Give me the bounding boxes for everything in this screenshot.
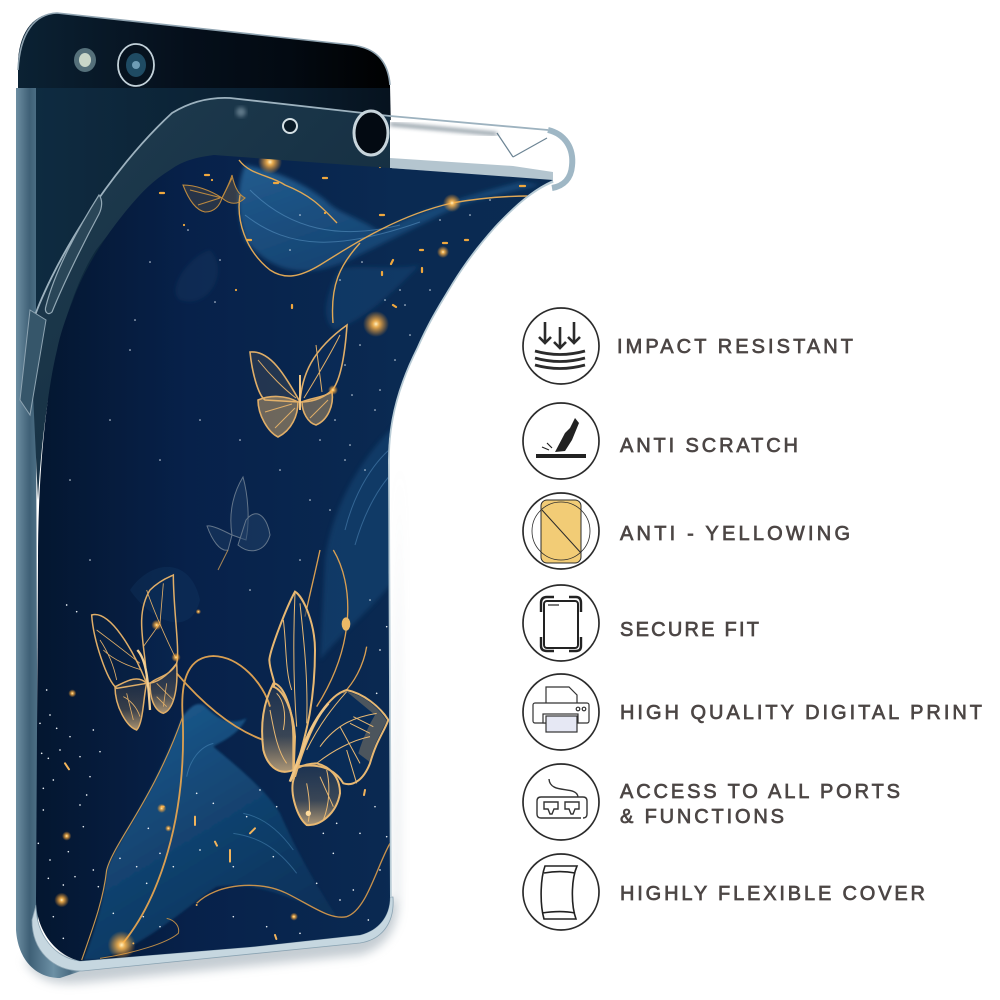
- label: & FUNCTIONS: [620, 806, 784, 828]
- butterfly: left: [92, 575, 178, 730]
- bottom sparks: [54, 609, 298, 959]
- lower artwork in zoom coordinates: [38, 550, 390, 960]
- butterfly: top small: [183, 175, 245, 212]
- label: ACCESS TO ALL PORTS: [620, 781, 900, 803]
- butterfly: upper middle: [250, 325, 347, 437]
- feature: ports: [523, 764, 900, 840]
- icon: secure fit: [523, 585, 599, 661]
- camera lens: [118, 44, 154, 86]
- icon: yellowing: [523, 493, 599, 569]
- label: ANTI SCRATCH: [620, 435, 798, 457]
- clear case body: [16, 88, 572, 978]
- feature list: [523, 308, 982, 930]
- lower side button: [20, 310, 46, 415]
- icon: impact: [523, 308, 599, 384]
- feature: anti yellowing: [523, 493, 850, 569]
- label: HIGH QUALITY DIGITAL PRINT: [620, 702, 982, 724]
- bottom dust: [38, 605, 387, 943]
- corner grip: [548, 130, 572, 188]
- faint smoke: [130, 567, 200, 622]
- window through the case: [390, 120, 551, 172]
- feature: digital print: [523, 674, 982, 750]
- feature: flexible cover: [523, 854, 925, 930]
- feature: secure fit: [523, 585, 759, 661]
- phone back glass: [15, 10, 395, 408]
- second gold line: [177, 673, 263, 740]
- drop shadow under case: [24, 460, 400, 983]
- flash: [74, 48, 96, 72]
- label: SECURE FIT: [620, 619, 759, 641]
- heart bud: [342, 617, 350, 631]
- long gold line: [120, 656, 270, 947]
- label: HIGHLY FLEXIBLE COVER: [620, 883, 925, 905]
- upper dust: [70, 167, 525, 600]
- camera ring on case: [354, 111, 388, 155]
- icon: flexible: [523, 854, 599, 930]
- label: [620, 781, 900, 828]
- case left rail: [16, 88, 84, 978]
- right swirl veil: [320, 425, 395, 660]
- icon: scratch: [523, 403, 599, 479]
- vine: [305, 550, 367, 707]
- icon: printer: [523, 674, 599, 750]
- strip under window: [390, 158, 553, 181]
- side button bump: [45, 195, 102, 314]
- label: ANTI - YELLOWING: [620, 523, 850, 545]
- printed artwork: [30, 150, 560, 970]
- case band highlight: [30, 98, 548, 330]
- butterfly: faint: [207, 477, 270, 570]
- left gold line: [82, 717, 183, 960]
- artwork background: [30, 150, 560, 970]
- top swirl strands: [245, 190, 420, 242]
- feature: impact resistant: [523, 308, 853, 384]
- phone back: [15, 10, 395, 408]
- label: IMPACT RESISTANT: [617, 336, 853, 358]
- right edge lip: [388, 181, 553, 897]
- phone outline highlight: [18, 13, 390, 85]
- small hole: [283, 119, 297, 133]
- butterfly: large: [262, 592, 388, 825]
- feature: anti scratch: [523, 403, 798, 479]
- blue veil: [83, 704, 337, 960]
- top gold lines: [239, 160, 530, 323]
- icon: ports: [523, 764, 599, 840]
- case top band: [30, 98, 390, 500]
- top swirl veil: [175, 165, 540, 330]
- upper sparks: [258, 150, 461, 395]
- bottom lip: [32, 897, 393, 971]
- speaker mark: [236, 107, 246, 117]
- bottom gold line: [197, 843, 390, 917]
- veil fold: [187, 743, 297, 873]
